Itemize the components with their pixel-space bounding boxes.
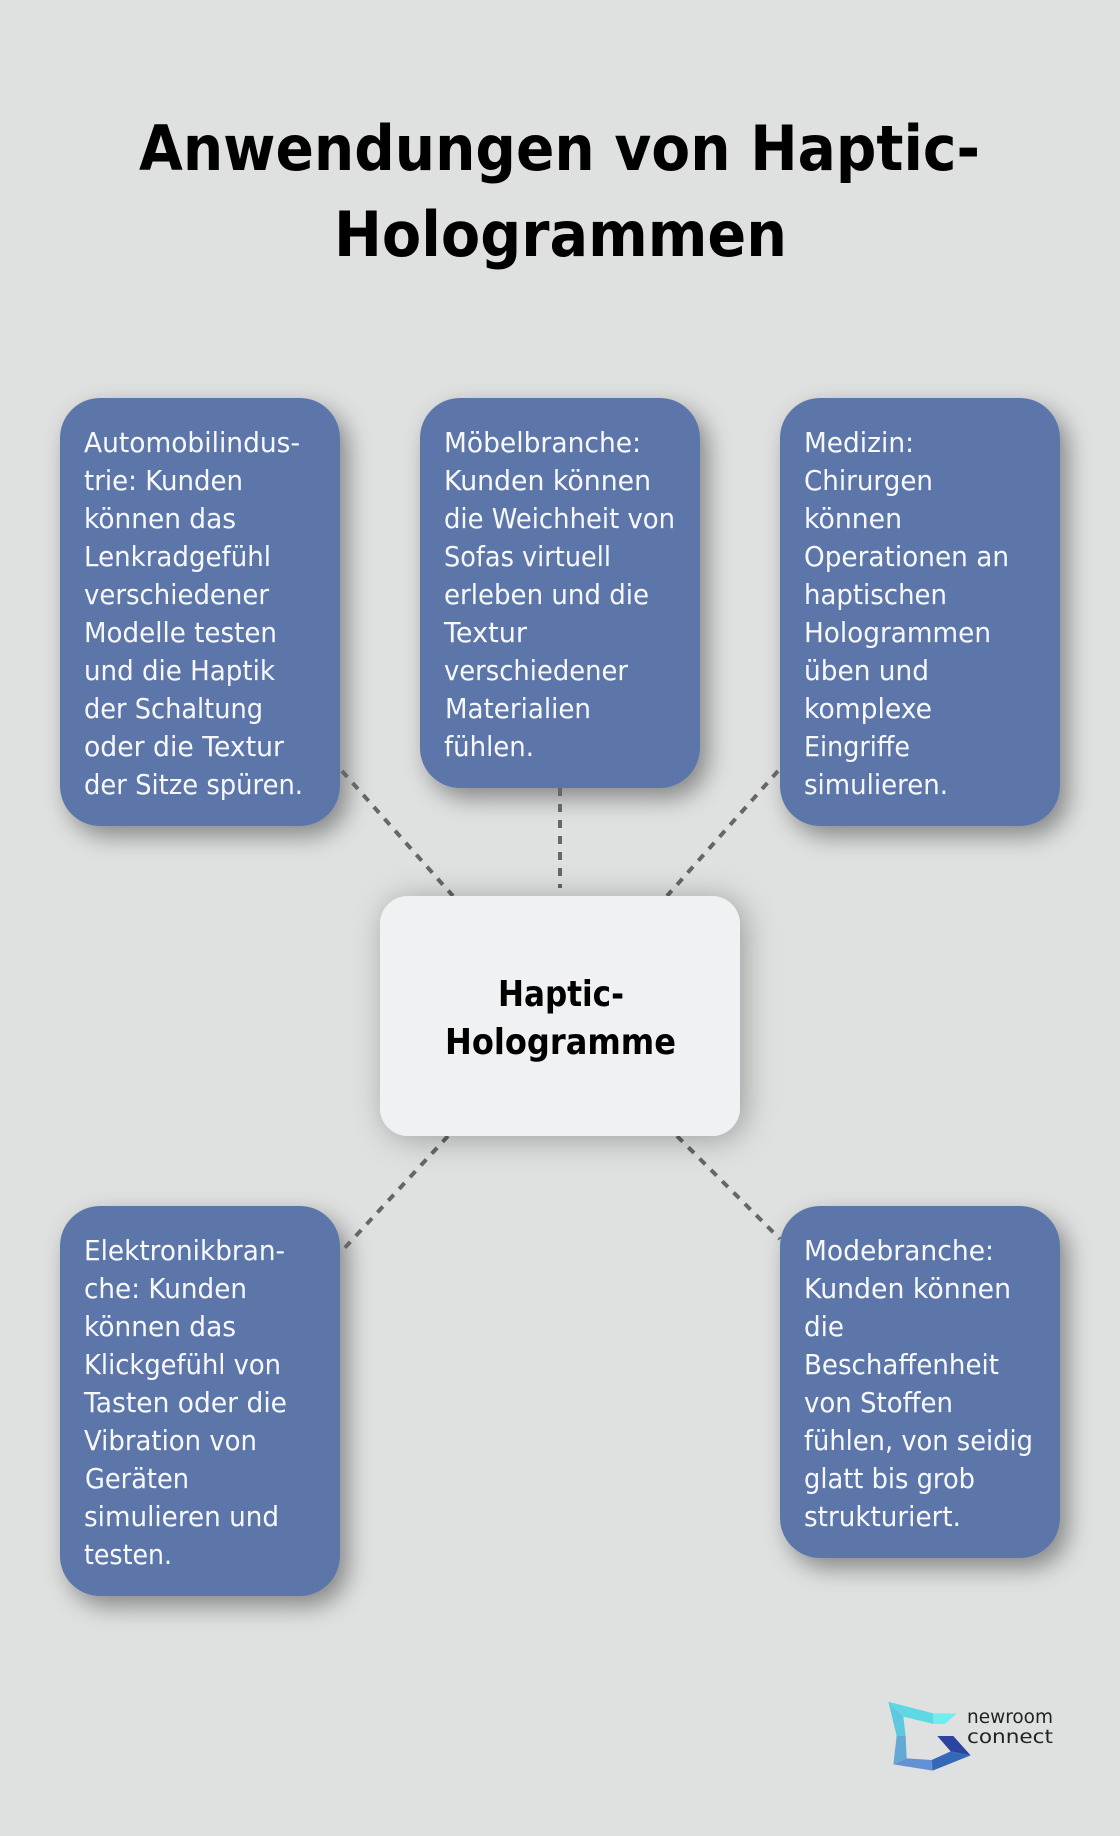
text: Medizin: können [804, 503, 902, 535]
panel: Modebranche [780, 1206, 1060, 1558]
text: Automobilindustrie: trie: Kunden [84, 465, 243, 497]
title: Hologrammen [334, 198, 787, 271]
text: Modebranche: von Stoffen [804, 1387, 953, 1419]
panel: Medizin [780, 398, 1060, 826]
text: Automobilindustrie: Modelle testen [84, 617, 277, 649]
logo wordmark: newroom [967, 1706, 1053, 1728]
text: Elektronikbranche: Klickgefühl von [84, 1349, 281, 1381]
text: Medizin: Medizin: [804, 427, 914, 459]
text: Automobilindustrie: oder die Textur [84, 731, 285, 763]
text: Möbelbranche: Sofas virtuell [444, 541, 611, 573]
text: Modebranche: die [804, 1311, 844, 1343]
panel: Möbelbranche [420, 398, 700, 788]
text: Elektronikbranche [83, 1235, 287, 1571]
text: Medizin: üben und [804, 655, 929, 687]
text: Elektronikbranche: Vibration von [84, 1425, 257, 1457]
text: Möbelbranche [443, 427, 675, 763]
text: Modebranche: Beschaffenheit [804, 1349, 999, 1381]
text: Automobilindustrie: Automobilindus- [84, 427, 300, 459]
text: Möbelbranche: die Weichheit von [444, 503, 675, 535]
text: Medizin: Chirurgen [804, 465, 933, 497]
text: Medizin: haptischen [804, 579, 947, 611]
center label: Haptic- [498, 974, 624, 1015]
text: Möbelbranche: Materialien [445, 693, 591, 725]
text: Elektronikbranche: simulieren und [84, 1501, 279, 1533]
text: Möbelbranche: Textur [443, 617, 528, 649]
text: Medizin: Operationen an [804, 541, 1009, 573]
logo wordmark: connect [967, 1726, 1053, 1748]
text: Elektronikbranche: Elektronikbran- [84, 1235, 285, 1267]
text: Automobilindustrie: und die Haptik [84, 655, 275, 687]
text: Modebranche: fühlen, von seidig [804, 1425, 1033, 1457]
text: Modebranche [804, 1235, 1033, 1533]
text: Möbelbranche: verschiedener [444, 655, 629, 687]
text: Medizin: Hologrammen [804, 617, 991, 649]
connectors: dashed lines [340, 771, 780, 1253]
text: Möbelbranche: Kunden können [444, 465, 651, 497]
text: Elektronikbranche: testen. [84, 1539, 172, 1571]
text: Automobilindustrie [84, 427, 303, 801]
text: Elektronikbranche: che: Kunden [84, 1273, 247, 1305]
title: Anwendungen von Haptic- [139, 112, 980, 185]
center label [445, 974, 676, 1063]
panel: center node [380, 896, 740, 1136]
text: Medizin: komplexe [804, 693, 932, 725]
text: Automobilindustrie: können das [84, 503, 236, 535]
title [139, 112, 980, 271]
text: Elektronikbranche: können das [84, 1311, 236, 1343]
text: Möbelbranche: erleben und die [444, 579, 649, 611]
text: Modebranche: glatt bis grob [804, 1463, 975, 1495]
panel: Automobilindustrie [60, 398, 340, 826]
text: Automobilindustrie: der Schaltung [84, 693, 263, 725]
text: Modebranche: Modebranche: [804, 1235, 994, 1267]
text: Medizin: simulieren. [804, 769, 948, 801]
panel: Elektronikbranche [60, 1206, 340, 1596]
text: Elektronikbranche: Geräten [85, 1463, 189, 1495]
text: Medizin: Eingriffe [804, 731, 910, 763]
center label: Hologramme [445, 1022, 676, 1063]
text: Automobilindustrie: der Sitze spüren. [84, 769, 303, 801]
text: Automobilindustrie: verschiedener [84, 579, 270, 611]
text: Automobilindustrie: Lenkradgefühl [84, 541, 271, 573]
text: Elektronikbranche: Tasten oder die [83, 1387, 287, 1419]
text: Medizin [804, 427, 1009, 801]
text: Modebranche: Kunden können [804, 1273, 1011, 1305]
text: Möbelbranche: fühlen. [444, 731, 534, 763]
logo: newroom connect [888, 1702, 1053, 1771]
icon: logo mark [888, 1702, 971, 1771]
text: Modebranche: strukturiert. [804, 1501, 961, 1533]
text: Möbelbranche: Möbelbranche: [444, 427, 641, 459]
logo wordmark [967, 1706, 1053, 1748]
